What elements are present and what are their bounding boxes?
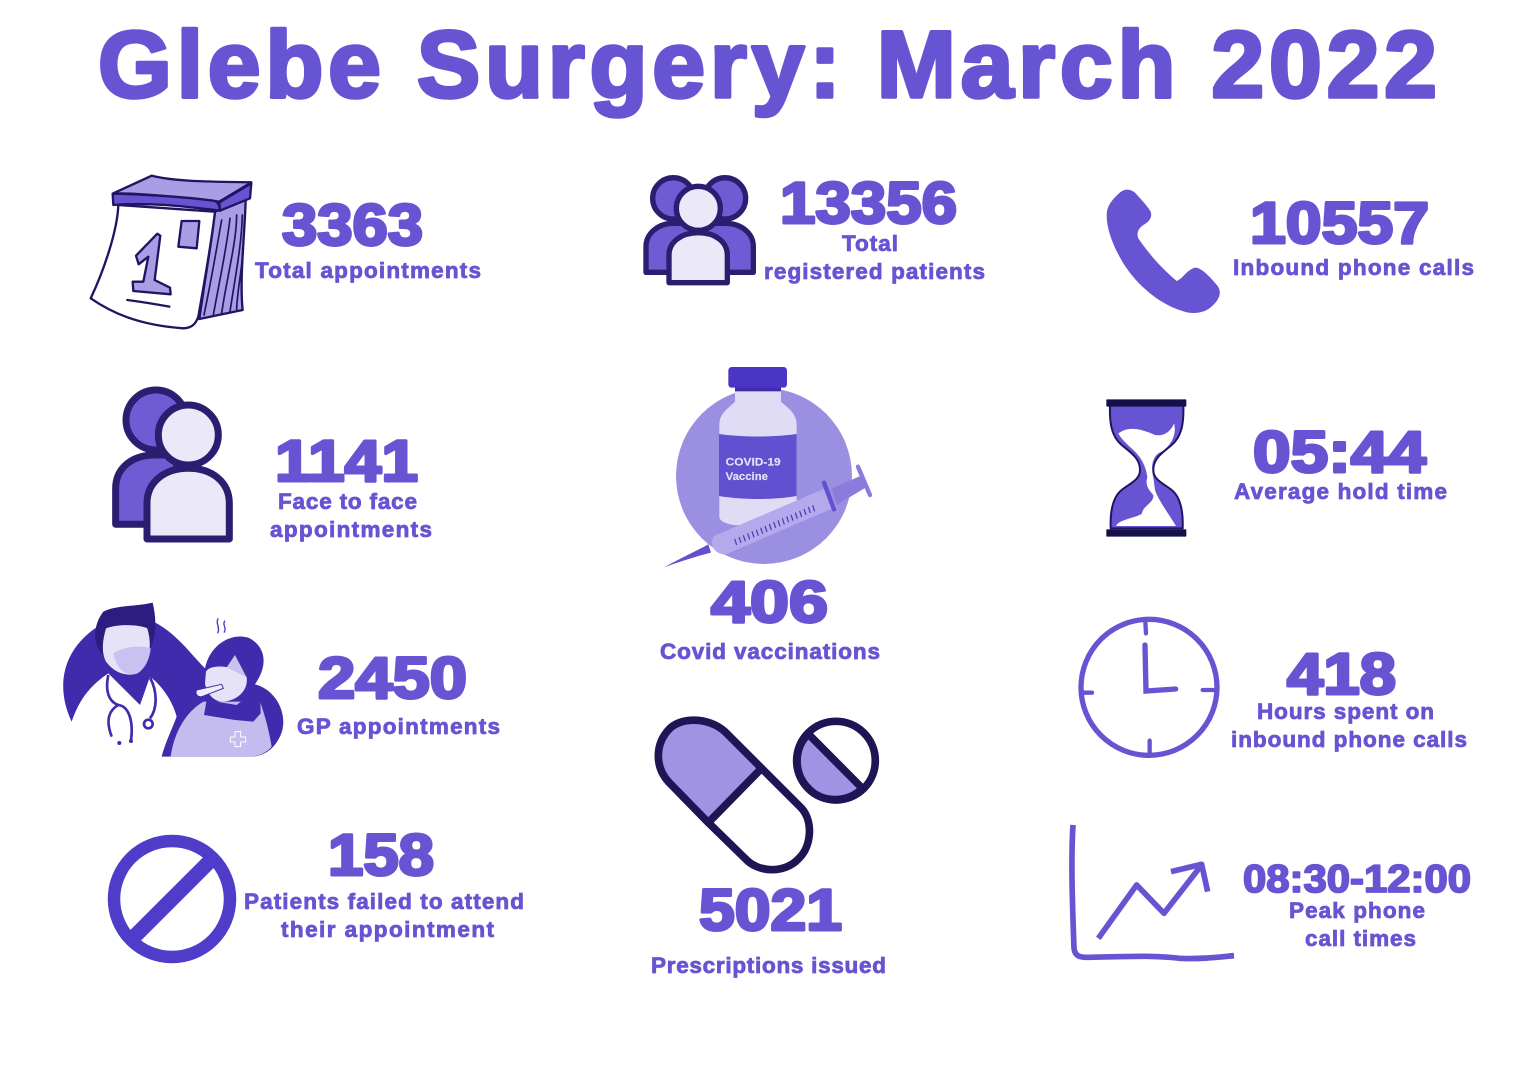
stat: face to face appointments: appointments	[270, 517, 432, 542]
stat: peak phone call times: 08:30-12:00	[1243, 858, 1471, 901]
title: Glebe Surgery: March 2022	[98, 12, 1437, 118]
stat: prescriptions issued	[651, 878, 886, 978]
stat: GP appointments	[297, 646, 500, 739]
icon: telephone handset	[1107, 190, 1220, 313]
icon: covid vaccine vial and syringe	[664, 367, 870, 567]
stat: failed to attend: 158	[328, 823, 434, 888]
stat: covid vaccinations: 406	[711, 570, 828, 635]
stat: inbound phone calls: Inbound phone calls	[1233, 255, 1474, 280]
icon: tear-off calendar	[91, 176, 251, 328]
stat: GP appointments: 2450	[318, 646, 467, 711]
stat: hours on phone: 418	[1287, 642, 1396, 707]
stat: hours on phone	[1231, 642, 1467, 752]
icon: rising line chart	[1072, 825, 1234, 959]
icon: clock	[1081, 619, 1217, 755]
stat: face to face appointments	[270, 429, 432, 542]
stat: covid vaccinations	[660, 570, 880, 664]
stat: peak phone call times: Peak phone	[1289, 898, 1425, 923]
stat: total appointments	[255, 193, 481, 283]
icon: no entry sign	[114, 841, 230, 957]
icon: hourglass	[1106, 399, 1186, 537]
stat: registered patients	[764, 171, 985, 284]
stat: face to face appointments: 1141	[275, 429, 418, 494]
stat: total appointments: Total appointments	[255, 258, 481, 283]
icon: two people	[116, 390, 229, 539]
stat: covid vaccinations: Covid vaccinations	[660, 639, 880, 664]
stat: average hold time	[1234, 420, 1447, 504]
stat: failed to attend: Patients failed to attend	[244, 889, 524, 914]
icon: covid vaccine vial and syringe: COVID-19	[726, 457, 781, 469]
stat: registered patients: 13356	[780, 171, 957, 236]
icon: covid vaccine vial and syringe: Vaccine	[726, 471, 768, 483]
icon: pills	[658, 720, 875, 870]
stat: peak phone call times: call times	[1305, 926, 1416, 951]
stat: prescriptions issued: 5021	[699, 878, 842, 943]
icon: doctor and patient with thermometer	[63, 603, 283, 757]
stat: failed to attend	[244, 823, 524, 942]
stat: face to face appointments: Face to face	[278, 489, 417, 514]
stat: average hold time: 05:44	[1253, 420, 1426, 485]
stat: registered patients: registered patients	[764, 259, 985, 284]
icon: group of three people	[646, 178, 753, 283]
stat: hours on phone: inbound phone calls	[1231, 727, 1467, 752]
stat: hours on phone: Hours spent on	[1257, 699, 1434, 724]
stat: GP appointments: GP appointments	[297, 714, 500, 739]
stat: prescriptions issued: Prescriptions issued	[651, 953, 886, 978]
stat: average hold time: Average hold time	[1234, 479, 1447, 504]
stat: total appointments: 3363	[282, 193, 423, 258]
stat: inbound phone calls	[1233, 191, 1474, 280]
stat: failed to attend: their appointment	[281, 917, 494, 942]
stat: registered patients: Total	[842, 231, 898, 256]
stat: peak phone call times	[1243, 858, 1471, 951]
stat: inbound phone calls: 10557	[1250, 191, 1429, 256]
